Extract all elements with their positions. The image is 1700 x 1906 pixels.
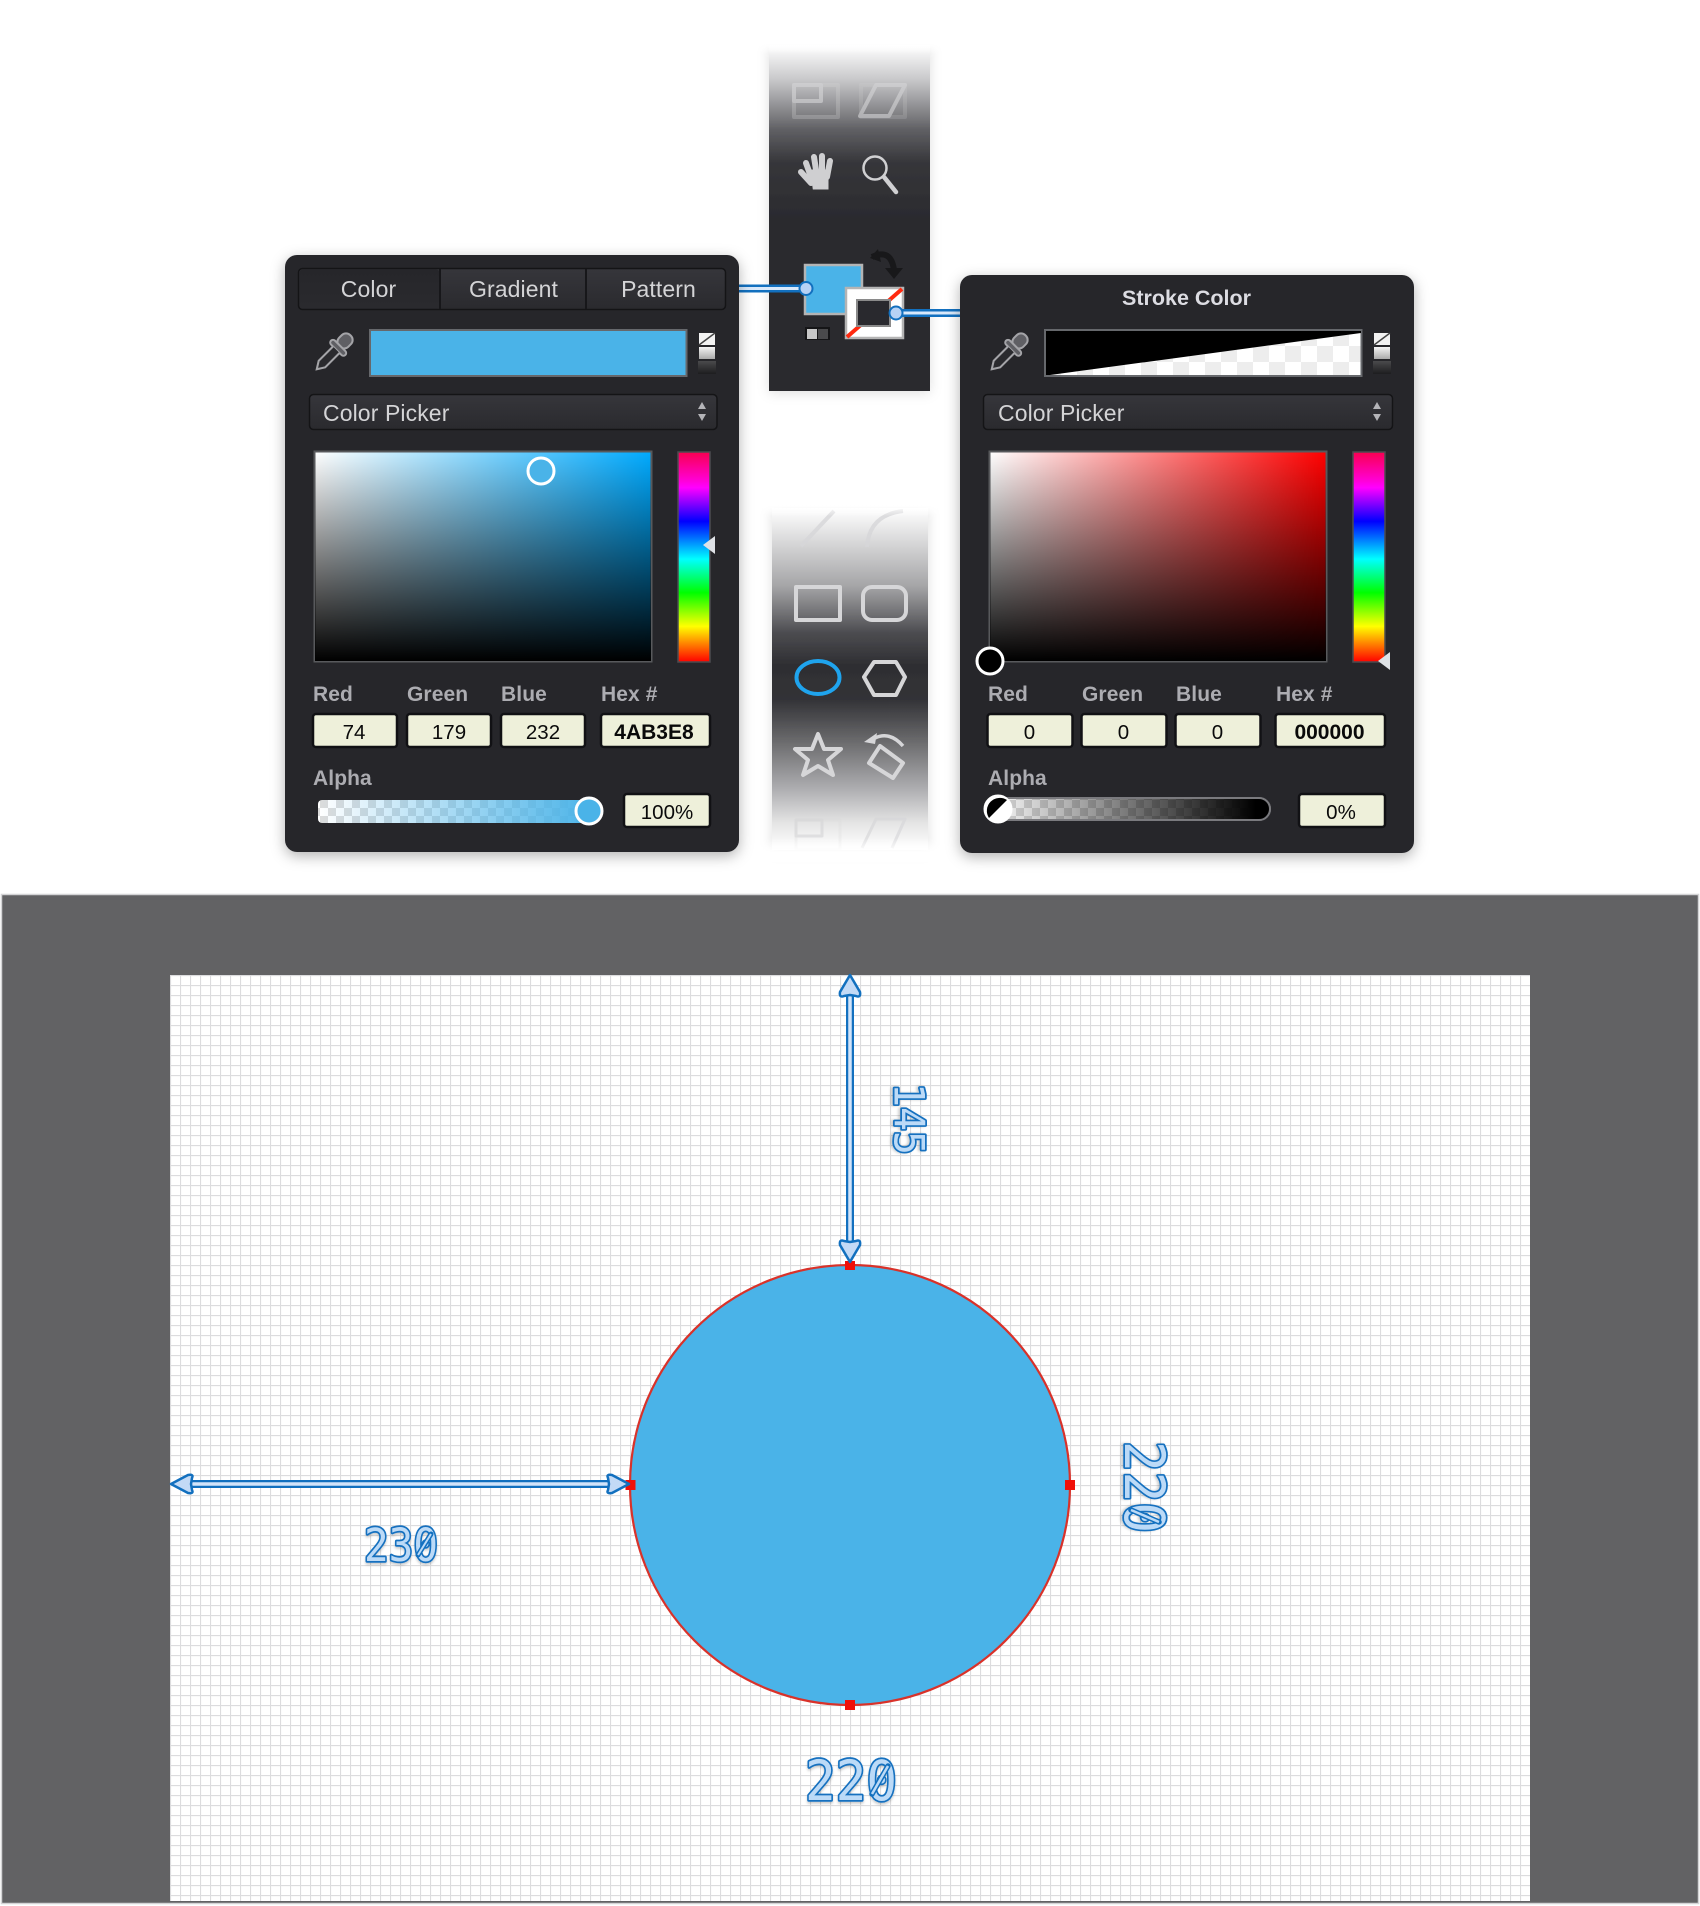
rgb and hex labels: Red bbox=[988, 683, 1028, 706]
label: 145: 145 bbox=[884, 1083, 934, 1155]
rgb and hex fields: 74 bbox=[343, 721, 365, 744]
alpha slider bbox=[985, 796, 1270, 822]
icon: polygon tool bbox=[864, 662, 905, 695]
icon: rotate tool bbox=[864, 733, 903, 778]
dropdown: color picker: Color Picker bbox=[998, 400, 1125, 426]
label: 220 width: 220 bbox=[805, 1749, 897, 1813]
icon: slice tool bbox=[860, 85, 905, 117]
anchor points bbox=[626, 1261, 1075, 1710]
rgb and hex fields: 000000 bbox=[1294, 721, 1365, 744]
rgb and hex labels: Red bbox=[313, 683, 353, 706]
icon: zoom tool bbox=[864, 156, 896, 192]
icon: eyedropper bbox=[310, 328, 358, 376]
label: 220 height: 220 bbox=[1112, 1441, 1176, 1533]
rgb and hex fields bbox=[988, 714, 1385, 747]
icon: star tool bbox=[795, 734, 841, 775]
hue strip bbox=[1353, 452, 1390, 670]
circle: blue fill with red stroke bbox=[626, 1261, 1075, 1710]
icon: swap arrow bbox=[870, 249, 903, 279]
tabs: color, gradient, pattern: Gradient bbox=[469, 276, 559, 302]
arrow: vertical 145 distance bbox=[840, 975, 860, 1262]
panel: color bbox=[285, 255, 739, 852]
icon: ellipse tool selected bbox=[796, 661, 840, 694]
stroke swatch bbox=[846, 288, 903, 338]
mini none, white and black swatches bbox=[1373, 333, 1391, 374]
icon: rectangle tool bbox=[796, 587, 840, 620]
rgb and hex labels bbox=[313, 683, 658, 706]
icon: line tool bbox=[801, 511, 834, 546]
connector: fill swatch to color panel bbox=[739, 282, 812, 295]
alpha handle bbox=[576, 798, 602, 824]
alpha value field: 0% bbox=[1326, 801, 1356, 824]
alpha value field bbox=[624, 794, 710, 827]
tabs: color, gradient, pattern: Color bbox=[341, 276, 396, 302]
rgb and hex fields: 0 bbox=[1024, 721, 1035, 744]
color field bbox=[314, 452, 652, 662]
hue strip bbox=[678, 452, 715, 662]
rgb and hex labels bbox=[988, 683, 1333, 706]
dropdown: color picker bbox=[310, 394, 717, 430]
rgb and hex fields: 0 bbox=[1212, 721, 1223, 744]
icon: default colors bbox=[805, 327, 830, 340]
toolbar: top section with fill and stroke swatches bbox=[750, 30, 950, 391]
hue marker bbox=[703, 536, 715, 554]
label: 230: 230 bbox=[364, 1519, 438, 1572]
rgb and hex labels: Blue bbox=[501, 683, 547, 706]
fill swatch bbox=[805, 265, 862, 314]
current color swatch bbox=[370, 330, 686, 376]
icon: eyedropper bbox=[985, 328, 1033, 376]
color field handle bbox=[977, 648, 1003, 674]
rgb and hex labels: Hex # bbox=[601, 683, 658, 706]
rgb and hex fields bbox=[313, 714, 710, 747]
artboard: grid canvas bbox=[170, 975, 1530, 1901]
mini none, white and black swatches bbox=[698, 333, 716, 374]
alpha value field bbox=[1299, 794, 1385, 827]
faded reflected tool icons bbox=[796, 819, 905, 850]
color field handle bbox=[528, 458, 554, 484]
alpha value field: 100% bbox=[641, 801, 693, 824]
current stroke swatch with transparency bbox=[1045, 330, 1362, 376]
dropdown: color picker: Color Picker bbox=[323, 400, 450, 426]
icon: hand tool bbox=[801, 156, 830, 187]
toolbar: shape tools section bbox=[755, 492, 945, 862]
alpha slider bbox=[318, 798, 602, 824]
rgb and hex fields: 0 bbox=[1118, 721, 1129, 744]
rgb and hex labels: Green bbox=[407, 683, 468, 706]
rgb and hex labels: Green bbox=[1082, 683, 1143, 706]
alpha label: Alpha bbox=[313, 767, 372, 790]
alpha label: Alpha bbox=[988, 767, 1047, 790]
alpha handle bbox=[985, 796, 1011, 822]
rgb and hex fields: 4AB3E8 bbox=[614, 721, 694, 744]
rgb and hex labels: Hex # bbox=[1276, 683, 1333, 706]
rgb and hex fields: 232 bbox=[526, 721, 560, 744]
heading: stroke color: Stroke Color bbox=[1122, 286, 1252, 310]
rgb and hex labels: Blue bbox=[1176, 683, 1222, 706]
icon: artboard tool bbox=[794, 85, 838, 117]
color field bbox=[977, 452, 1326, 674]
tabs: color, gradient, pattern bbox=[298, 268, 726, 310]
dropdown: color picker bbox=[984, 394, 1392, 430]
rgb and hex fields: 179 bbox=[432, 721, 466, 744]
hue marker bbox=[1378, 652, 1390, 670]
pasteboard: gray workspace bbox=[0, 894, 1700, 1906]
icon: rounded rectangle tool bbox=[863, 587, 906, 620]
icon: curve tool bbox=[867, 511, 903, 547]
panel: stroke color bbox=[960, 275, 1414, 853]
arrow: horizontal 230 distance bbox=[171, 1475, 629, 1493]
tabs: color, gradient, pattern: Pattern bbox=[621, 276, 696, 302]
connector: stroke swatch to stroke panel bbox=[890, 306, 960, 320]
